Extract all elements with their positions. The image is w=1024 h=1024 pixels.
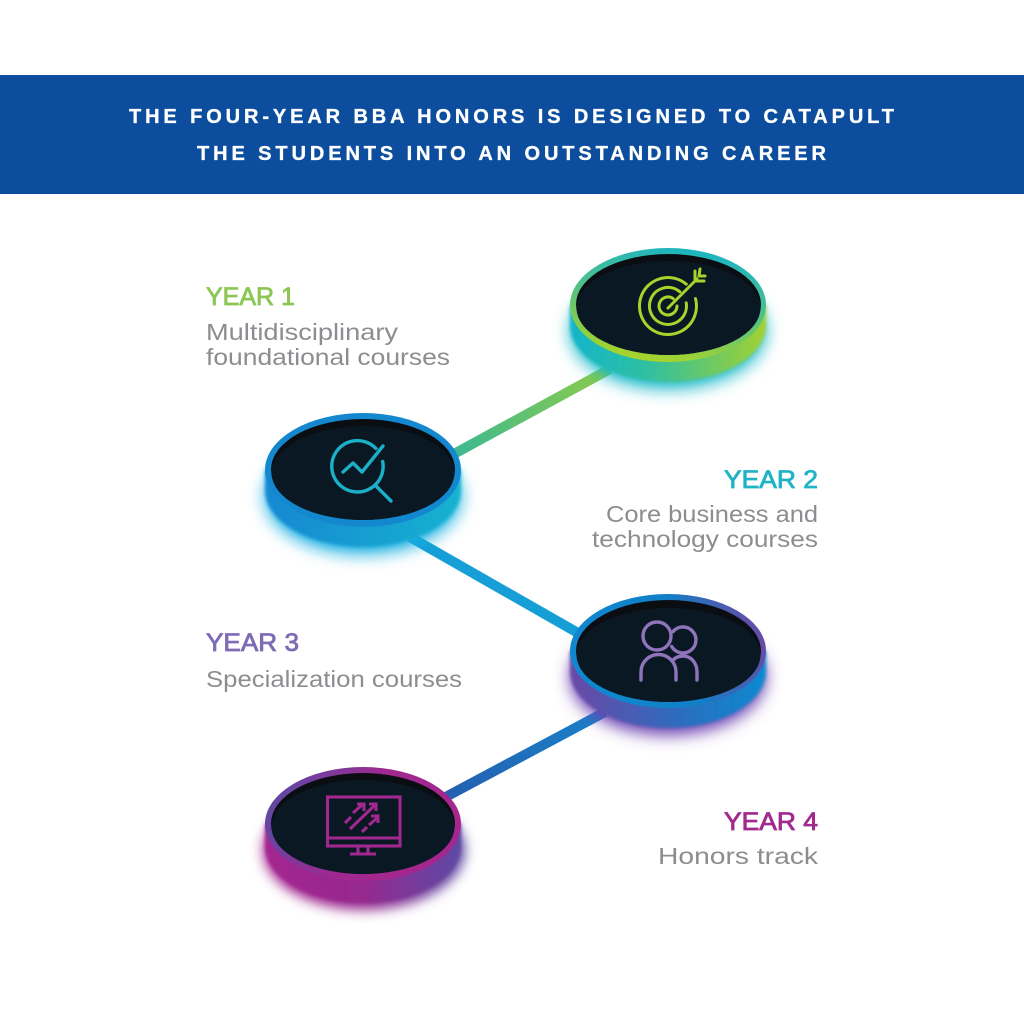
icon: magnifier with chart xyxy=(332,441,391,501)
heading line 1: THE FOUR-YEAR BBA HONORS IS DESIGNED TO CATAPULT xyxy=(129,106,894,128)
text block: year 2: Core business and xyxy=(606,501,818,527)
icon: target with arrow xyxy=(639,269,705,335)
text block: year 1: Multidisciplinary xyxy=(206,319,399,345)
disc: year 4 xyxy=(263,767,465,910)
text block: year 1: foundational courses xyxy=(206,344,450,370)
heading line 2: THE STUDENTS INTO AN OUTSTANDING CAREER xyxy=(197,143,827,165)
text block: year 2 xyxy=(592,466,818,552)
disc: year 2 xyxy=(265,413,461,554)
connector: year 1 to year 2 xyxy=(452,369,610,455)
text block: year 4: Honors track xyxy=(658,843,819,869)
text block: year 1 xyxy=(206,283,450,370)
disc: year 1 xyxy=(570,248,766,389)
connector: year 2 to year 3 xyxy=(410,537,585,637)
header banner xyxy=(0,75,1024,194)
text block: year 4: YEAR 4 xyxy=(724,808,818,836)
text block: year 2: YEAR 2 xyxy=(724,466,818,494)
text block: year 3: YEAR 3 xyxy=(206,629,299,657)
disc: year 3 xyxy=(570,594,766,735)
icon: two people xyxy=(641,622,697,680)
connector: year 3 to year 4 xyxy=(440,712,605,800)
text block: year 3: Specialization courses xyxy=(206,666,462,692)
text block: year 4 xyxy=(658,808,819,869)
text block: year 2: technology courses xyxy=(592,526,818,552)
icon: monitor with rising arrows xyxy=(328,797,400,854)
text block: year 1: YEAR 1 xyxy=(206,283,295,311)
text block: year 3 xyxy=(206,629,462,692)
